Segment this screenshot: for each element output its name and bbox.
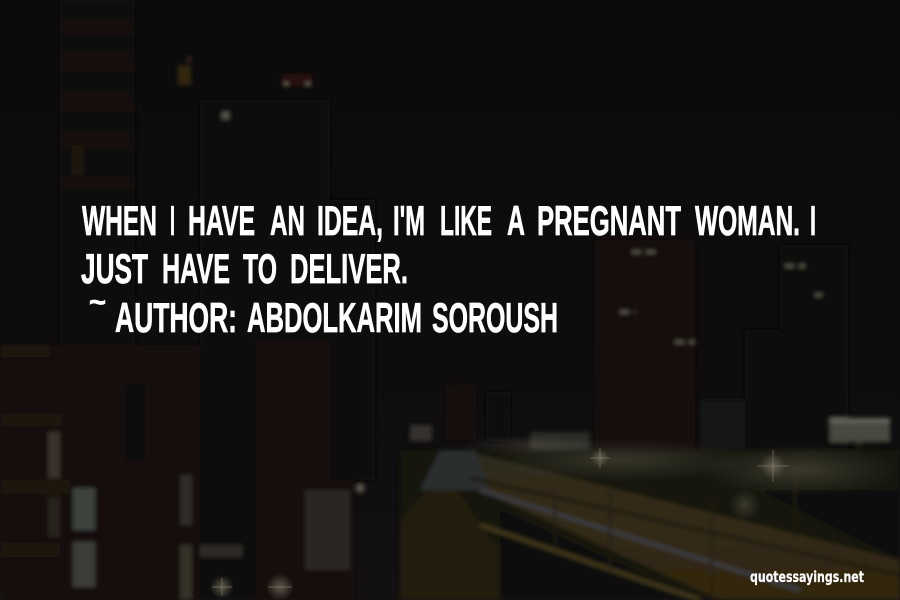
author name: SOROUSH xyxy=(432,294,558,341)
author name: ABDOLKARIM xyxy=(247,294,422,341)
author name xyxy=(115,294,558,341)
scenery: city lights xyxy=(210,435,900,600)
quote line 1: I'M xyxy=(393,197,425,244)
quote line 1: IDEA, xyxy=(317,197,383,244)
quote line 2 xyxy=(81,245,408,292)
quote text xyxy=(81,197,816,292)
quote line 1: PREGNANT xyxy=(537,197,681,244)
quote line 1: LIKE xyxy=(440,197,492,244)
author attribution xyxy=(89,286,558,341)
quote line 2: HAVE xyxy=(162,245,230,292)
quote line 1 xyxy=(82,197,816,244)
author name: AUTHOR: xyxy=(115,294,237,341)
quote line 2: TO xyxy=(243,245,277,292)
quote line 2: JUST xyxy=(81,245,148,292)
quote line 2: DELIVER. xyxy=(290,245,408,292)
quote line 1: WOMAN. xyxy=(695,197,800,244)
scenery: highway with light trails xyxy=(400,450,900,600)
quote line 1: I xyxy=(810,197,816,244)
scenery: left buildings xyxy=(0,0,375,600)
quote line 1: HAVE xyxy=(188,197,255,244)
quote line 1: AN xyxy=(270,197,305,244)
scenery: central and right towers xyxy=(410,240,890,512)
quote line 1: WHEN xyxy=(82,197,157,244)
tilde: ~ xyxy=(89,286,106,319)
quote line 1: A xyxy=(507,197,525,244)
quote line 1: I xyxy=(170,197,175,244)
